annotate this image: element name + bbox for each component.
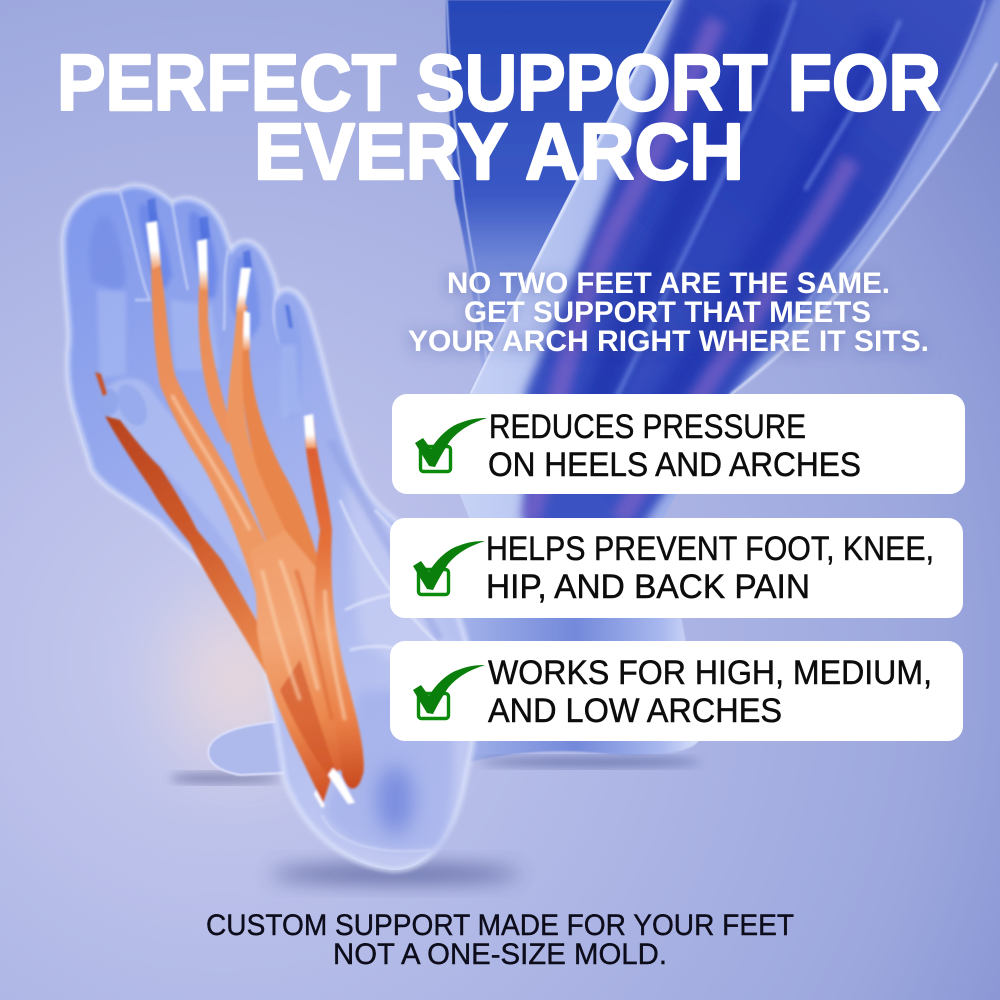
deep blue calf	[525, 0, 1000, 530]
icon: green check 2	[413, 541, 485, 594]
muscle bundle	[95, 221, 364, 808]
subheading	[408, 267, 929, 358]
heel inner	[325, 690, 454, 852]
title	[57, 38, 941, 196]
footer text: NOT A ONE-SIZE MOLD.	[333, 938, 667, 971]
footer text: CUSTOM SUPPORT MADE FOR YOUR FEET	[206, 909, 794, 942]
streaks	[530, 20, 716, 520]
panel: benefit 2: HIP, AND BACK PAIN	[486, 568, 810, 606]
icon: anatomical foot	[63, 186, 475, 870]
panel: benefit 3: AND LOW ARCHES	[488, 692, 782, 730]
white tendon tips	[146, 221, 161, 270]
subheading: GET SUPPORT THAT MEETS	[464, 296, 871, 329]
toe-tip blue marks	[147, 198, 293, 328]
panel: benefit 1: REDUCES PRESSURE	[489, 408, 806, 446]
footer text	[206, 909, 794, 971]
second foot lobe	[208, 721, 285, 775]
icon: green check 1	[415, 418, 487, 472]
pale silhouette of right calf	[450, 0, 1000, 520]
icon: green check 3	[413, 665, 485, 718]
toe interiors	[89, 216, 126, 288]
streak highlights	[172, 395, 345, 720]
subheading: YOUR ARCH RIGHT WHERE IT SITS.	[408, 325, 929, 358]
ankle bones	[345, 480, 450, 700]
panel: benefit 2: HELPS PREVENT FOOT, KNEE,	[486, 530, 934, 568]
big toe tendon, dark	[95, 372, 107, 396]
right edge highlight	[690, 63, 997, 470]
subheading: NO TWO FEET ARE THE SAME.	[447, 267, 890, 300]
panel: benefit 1	[392, 394, 965, 494]
title: EVERY ARCH	[254, 107, 744, 196]
main bundle	[250, 530, 364, 803]
background leg illustration	[446, 0, 1000, 762]
panel: benefit 2	[390, 518, 963, 618]
calf left	[446, 0, 680, 372]
achilles white tips	[328, 768, 355, 804]
foot body	[63, 186, 475, 870]
panel: benefit 1: ON HEELS AND ARCHES	[488, 446, 861, 484]
warm glow behind muscles	[180, 600, 300, 760]
bones	[97, 290, 300, 420]
panel: benefit 3: WORKS FOR HIGH, MEDIUM,	[488, 654, 932, 692]
fifth toe muscle	[305, 420, 363, 789]
lower leg	[450, 520, 700, 762]
ground shadows	[170, 757, 700, 882]
toe divisions	[120, 192, 280, 345]
tendon toes	[151, 262, 285, 600]
panel: benefit 3	[390, 641, 963, 741]
